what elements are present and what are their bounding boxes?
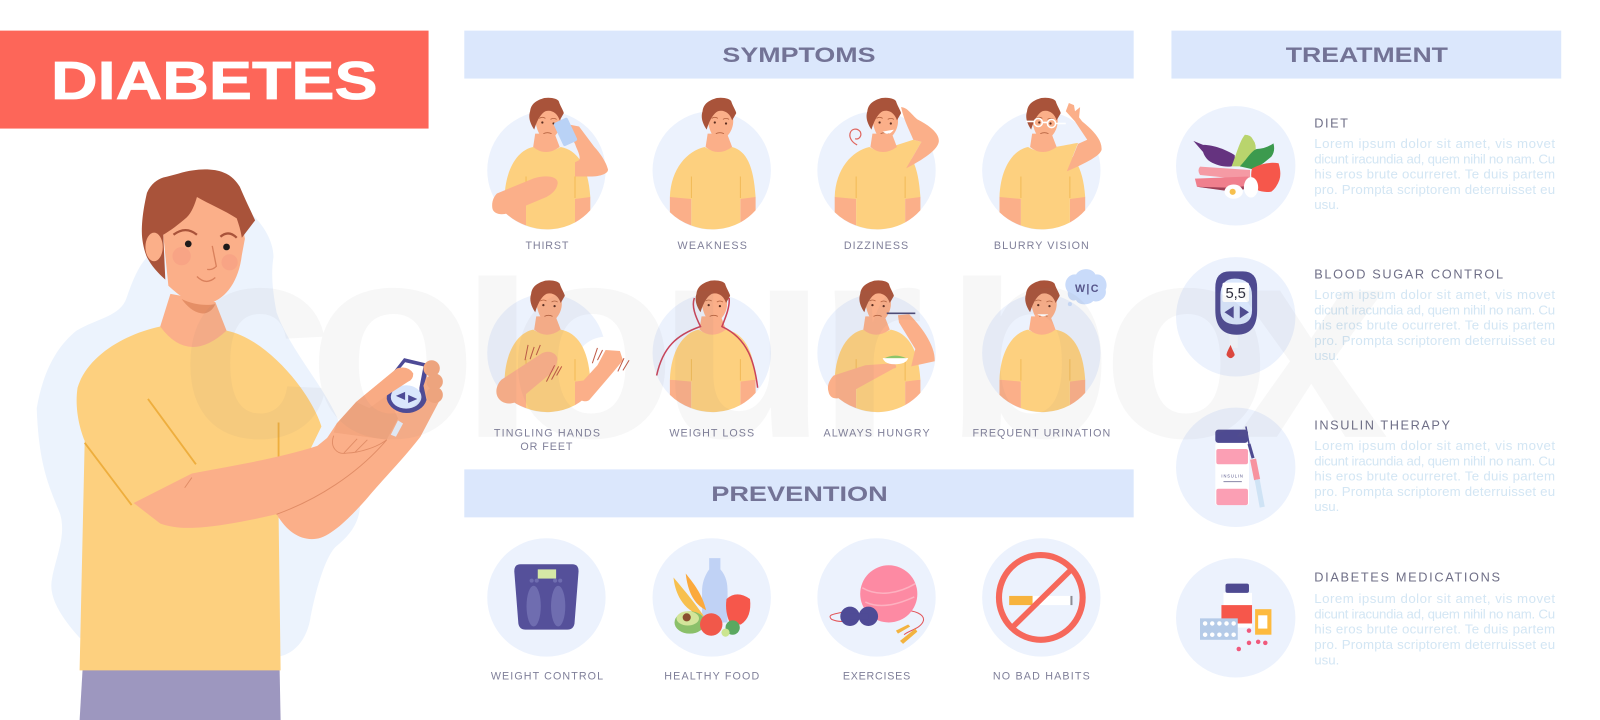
label: blurry vision: BLURRY VISION (994, 240, 1089, 252)
shirt (77, 327, 321, 670)
label: frequent urination: FREQUENT URINATION (972, 428, 1110, 440)
heading: treatment (1171, 31, 1561, 79)
icon: no smoking (982, 538, 1101, 657)
panel: prevention (487, 538, 1101, 683)
text: blood sugar control: usu. (1314, 348, 1339, 363)
text: diabetes medications: usu. (1314, 652, 1339, 667)
text: diabetes medications: pro. Prompta scriptorem deterruisset eu (1314, 637, 1555, 652)
text: diet: dicunt iracundia ad, quem nihil no nam. Cu (1314, 151, 1555, 166)
icon: glucometer (1176, 257, 1295, 377)
symptom: weakness (653, 98, 771, 230)
watermark: colourbox (180, 187, 1390, 496)
palm lines (185, 436, 387, 514)
text: diet: usu. (1314, 197, 1339, 212)
label: healthy food: HEALTHY FOOD (664, 671, 759, 683)
text: diabetes medications: Lorem ipsum dolor sit amet, vis movet (1314, 591, 1555, 606)
text: blood sugar control (1314, 287, 1555, 363)
neck (160, 294, 227, 347)
symptom: frequent urination (982, 269, 1107, 412)
thumb (356, 368, 413, 408)
hair (142, 169, 255, 280)
panel: symptoms (487, 98, 1110, 453)
title: diet: DIET (1314, 116, 1348, 131)
nose and mouth (197, 246, 216, 281)
label: weight control: WEIGHT CONTROL (491, 671, 603, 683)
text: diet: his eros brute ocurreret. Te duis partem (1314, 167, 1555, 182)
item: diet (1176, 106, 1555, 226)
symptom: thirst (487, 98, 608, 230)
label: thirst: THIRST (526, 240, 569, 252)
symptom: always hungry (817, 280, 936, 412)
label: dizziness: DIZZINESS (844, 240, 908, 252)
text: diabetes medications (1314, 591, 1555, 667)
text: blood sugar control: Lorem ipsum dolor sit amet, vis movet (1314, 287, 1555, 302)
heading: symptoms: SYMPTOMS (722, 43, 876, 67)
symptom: blurry vision (982, 98, 1102, 230)
label: exercises: EXERCISES (843, 671, 910, 683)
text: blood sugar control: pro. Prompta scriptorem deterruisset eu (1314, 333, 1555, 348)
label: tingling hands or feet: OR FEET (520, 441, 573, 453)
title banner (0, 31, 429, 129)
meter hand shade (334, 395, 398, 440)
glucose meter (387, 358, 427, 437)
label: tingling hands or feet (494, 428, 600, 453)
text: insulin therapy: dicunt iracundia ad, quem nihil no nam. Cu (1314, 453, 1555, 468)
fingers (423, 360, 443, 403)
item: diabetes medications (1176, 558, 1555, 678)
sleeve lines (85, 399, 279, 505)
label: weight loss: WEIGHT LOSS (669, 428, 754, 440)
cheeks (172, 247, 238, 270)
thought cloud: WC (1065, 269, 1107, 306)
icon: insulin: INSULIN (1221, 474, 1243, 479)
eyes and brows (173, 230, 237, 250)
text: insulin therapy: his eros brute ocurreret. Te duis partem (1314, 469, 1555, 484)
label: always hungry: ALWAYS HUNGRY (823, 428, 930, 440)
heading: symptoms (464, 31, 1134, 79)
main arm (134, 433, 387, 528)
icon: healthy food (653, 538, 771, 657)
text: insulin therapy: Lorem ipsum dolor sit amet, vis movet (1314, 438, 1555, 453)
symptom: weight loss (653, 280, 771, 412)
text: insulin therapy (1314, 438, 1555, 514)
title: diabetes medications: DIABETES MEDICATIONS (1314, 570, 1500, 585)
man with glucose meter (77, 169, 443, 720)
symptom: dizziness (817, 98, 939, 230)
text: diabetes medications: his eros brute ocurreret. Te duis partem (1314, 622, 1555, 637)
heading: treatment: TREATMENT (1286, 43, 1448, 67)
title: insulin therapy: INSULIN THERAPY (1314, 418, 1450, 433)
text: insulin therapy: usu. (1314, 499, 1339, 514)
symptom: tingling hands or feet (487, 280, 638, 412)
label: tingling hands or feet: TINGLING HANDS (494, 428, 600, 440)
face (163, 194, 245, 304)
icon: weight scale (487, 538, 606, 657)
title: blood sugar control: BLOOD SUGAR CONTROL (1314, 267, 1503, 282)
text: diabetes medications: dicunt iracundia ad, quem nihil no nam. Cu (1314, 606, 1555, 621)
icon: diet (1176, 106, 1295, 226)
icon: glucometer: 5,5 (1226, 286, 1246, 302)
item: blood sugar control (1176, 257, 1555, 377)
label: weakness: WEAKNESS (678, 240, 747, 252)
panel: treatment (1176, 106, 1555, 678)
text: insulin therapy: pro. Prompta scriptorem deterruisset eu (1314, 484, 1555, 499)
icon: medications (1176, 558, 1295, 678)
text: diet: Lorem ipsum dolor sit amet, vis movet (1314, 136, 1555, 151)
icon: insulin (1176, 408, 1295, 527)
text: diet (1314, 136, 1555, 212)
pants (80, 668, 281, 720)
heading: prevention (464, 469, 1134, 517)
label: no bad habits: NO BAD HABITS (993, 671, 1090, 683)
text: blood sugar control: his eros brute ocurreret. Te duis partem (1314, 318, 1555, 333)
chin shadow (182, 299, 215, 313)
holding hand and lower arm (277, 368, 440, 539)
thought cloud: WC: W|C (1075, 283, 1099, 295)
icon: exercises (817, 538, 936, 657)
ear (145, 233, 163, 261)
heading: prevention: PREVENTION (711, 482, 888, 506)
item: insulin therapy (1176, 408, 1555, 527)
background blob (37, 215, 361, 656)
text: diet: pro. Prompta scriptorem deterruisset eu (1314, 182, 1555, 197)
text: blood sugar control: dicunt iracundia ad, quem nihil no nam. Cu (1314, 302, 1555, 317)
title: DIABETES (51, 51, 378, 111)
